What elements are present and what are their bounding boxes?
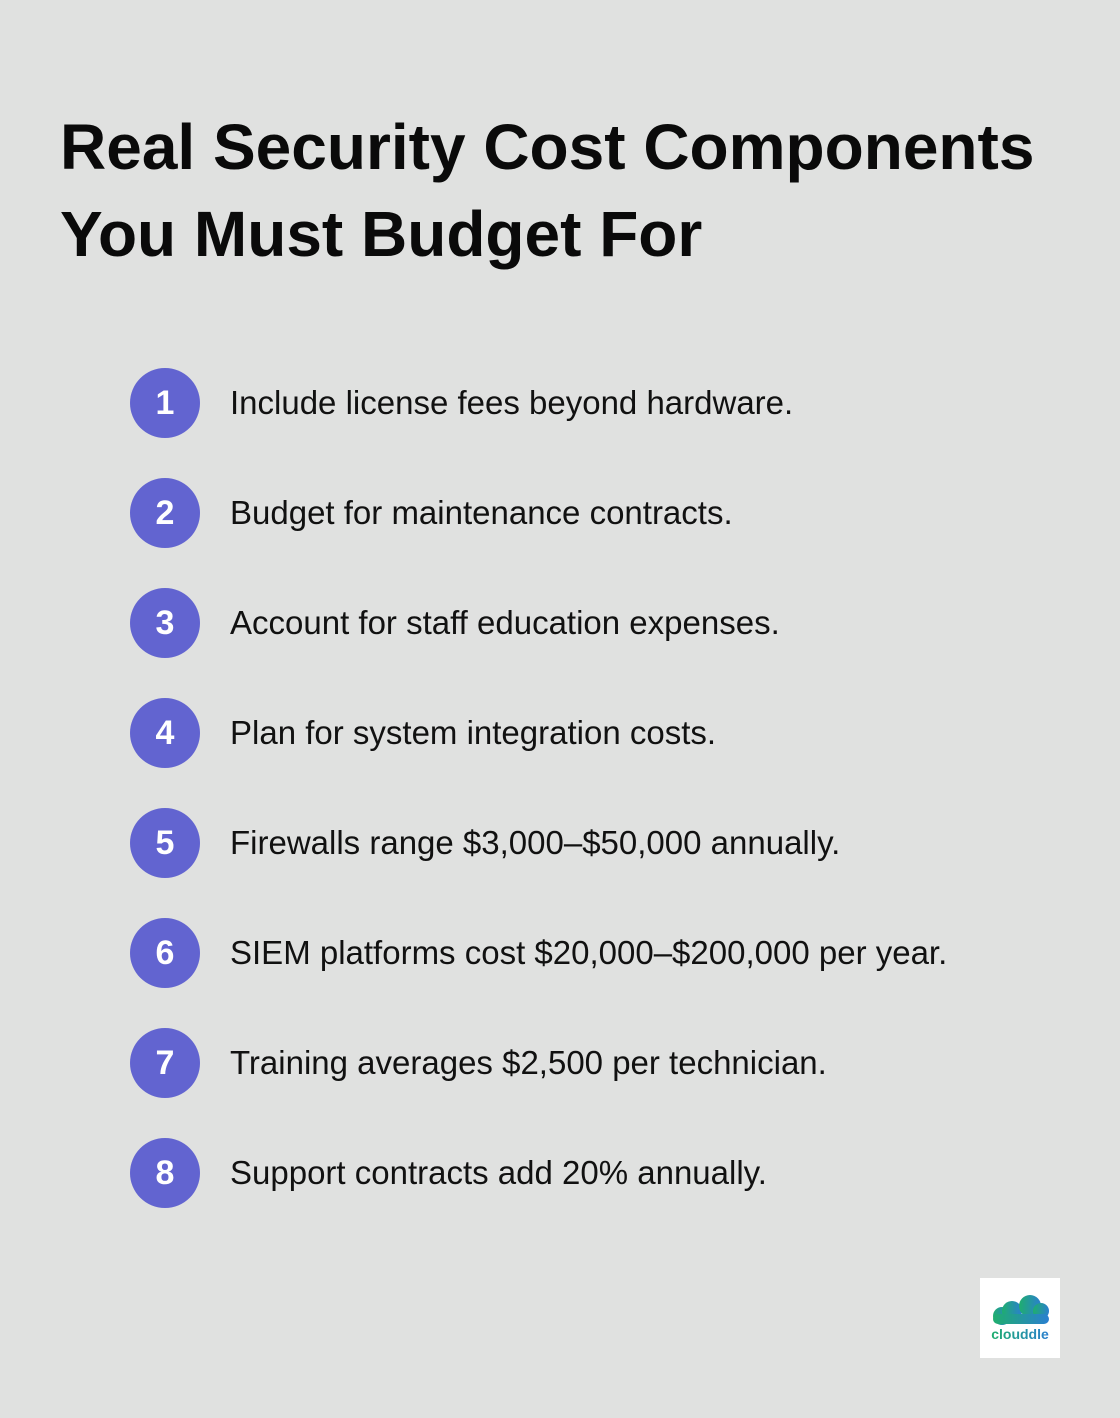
item 7: Training averages $2,500 per technician.: [230, 1044, 827, 1081]
item 5: 5: [156, 824, 174, 862]
item 4: [130, 698, 716, 768]
item 6: [130, 918, 947, 988]
item 2: 2: [156, 494, 174, 532]
item 3: 3: [156, 604, 174, 642]
item 1: 1: [156, 384, 174, 422]
item 6: 6: [156, 934, 174, 972]
item 8: [130, 1138, 767, 1208]
item 5: [130, 808, 840, 878]
item 2: Budget for maintenance contracts.: [230, 494, 733, 531]
item 3: Account for staff education expenses.: [230, 604, 780, 641]
item 1: Include license fees beyond hardware.: [230, 384, 793, 421]
item 8: 8: [156, 1154, 174, 1192]
item 3: [130, 588, 780, 658]
item 8: Support contracts add 20% annually.: [230, 1154, 767, 1191]
logo: clouddle: [980, 1278, 1060, 1358]
logo: clouddle: clouddle: [991, 1326, 1049, 1342]
item 5: Firewalls range $3,000–$50,000 annually.: [230, 824, 840, 861]
title: You Must Budget For: [60, 198, 702, 270]
item 7: [130, 1028, 827, 1098]
item 4: Plan for system integration costs.: [230, 714, 716, 751]
item 4: 4: [156, 714, 174, 752]
item 7: 7: [156, 1044, 174, 1082]
item 6: SIEM platforms cost $20,000–$200,000 per year.: [230, 934, 947, 971]
title: Real Security Cost Components: [60, 111, 1034, 183]
item 1: [130, 368, 793, 438]
title: [60, 111, 1034, 270]
item 2: [130, 478, 733, 548]
